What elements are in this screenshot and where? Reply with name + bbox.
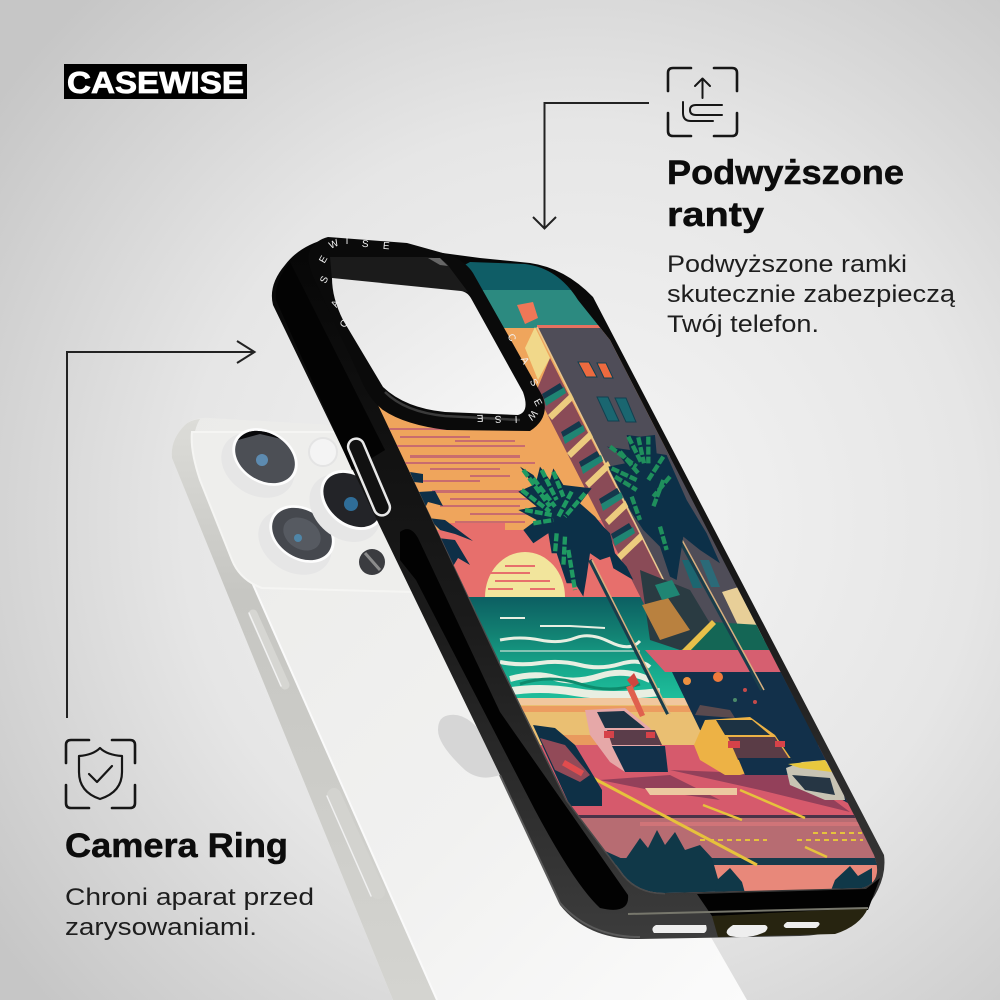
wave green: [520, 679, 640, 689]
building facade: [537, 325, 800, 700]
ring lettering: S: [527, 377, 540, 389]
facade edge line: [536, 326, 664, 580]
rooftop block: [517, 302, 538, 324]
crosswalk: [645, 788, 737, 795]
building windows: [578, 362, 720, 588]
ring lettering: E: [476, 412, 484, 423]
road shadows: [600, 770, 850, 812]
text: camera ring description: Chroni aparat przed: [65, 884, 314, 911]
store lights: [683, 672, 757, 718]
sky streaks: [388, 428, 535, 523]
text: camera ring description: zarysowaniami.: [65, 914, 257, 941]
road pink: [540, 745, 856, 820]
car front right: [786, 760, 845, 800]
palm middle: [518, 467, 633, 597]
sky coral: [437, 520, 662, 610]
ring lettering: S: [318, 274, 331, 285]
storefront: [672, 672, 848, 804]
text: raised edges description: [667, 251, 956, 338]
beach: [517, 698, 688, 705]
shopfront details: [640, 570, 710, 650]
car pink: [585, 708, 668, 772]
waves: [500, 618, 660, 695]
artwork: retro beach street: [370, 255, 900, 895]
case bottom black band: [697, 878, 880, 916]
case outer rim highlight: [500, 775, 640, 937]
ring bottom bevel: [385, 392, 520, 420]
case upper left band: [276, 262, 385, 470]
arrow: to camera ring: [67, 341, 254, 718]
logo: CASEWISE: CASEWISE: [67, 65, 244, 100]
phone case: [272, 238, 884, 939]
palm left: [410, 472, 473, 568]
palm right: [607, 435, 720, 580]
heading: Podwyższone ranty: [667, 154, 904, 234]
camera cut-out: [332, 278, 526, 415]
icon: shield check: [66, 740, 135, 808]
text: raised edges description: skutecznie zabezpieczą: [667, 281, 956, 308]
ring lettering: E: [382, 241, 390, 252]
text: raised edges description: Podwyższone ramki: [667, 251, 907, 278]
side buttons: [249, 613, 378, 896]
ring lettering: S: [494, 413, 502, 424]
charging and speaker ports: [652, 922, 820, 937]
ring lettering: C: [505, 332, 518, 344]
sun: [485, 552, 565, 597]
ring lettering: C: [338, 318, 351, 330]
balcony band: [538, 358, 662, 604]
heading: Camera Ring: Camera Ring: [65, 827, 288, 865]
camera ring: [309, 236, 545, 431]
arrow: to raised edges: [533, 103, 649, 228]
ring highlight: [428, 258, 448, 266]
volume slot pill: [346, 436, 392, 518]
pink cornice: [537, 325, 602, 328]
car yellow: [694, 717, 792, 775]
foreground plants: [592, 830, 872, 893]
sky teal: [466, 262, 572, 291]
white phone: [172, 416, 747, 1000]
store pink band: [645, 650, 790, 672]
ring lettering: I: [515, 413, 518, 424]
road markings: [593, 778, 863, 865]
tall sign: [722, 588, 764, 640]
case bottom lip: [712, 908, 868, 937]
side highlight: [251, 580, 437, 1000]
store roof: [691, 622, 772, 656]
apple logo: [438, 715, 500, 778]
road lower band: [578, 815, 876, 863]
ring lettering: A: [329, 298, 342, 309]
sea: [468, 597, 760, 705]
ring lettering: E: [317, 254, 330, 265]
ring lettering: A: [518, 355, 531, 367]
bottom edge highlight: [628, 908, 868, 914]
heading: Podwyższone ranty: Podwyższone: [667, 154, 904, 192]
ring inner wall: [330, 257, 468, 292]
ring lettering: I: [346, 236, 348, 247]
roof gold accent: [682, 620, 716, 650]
text: raised edges description: Twój telefon.: [667, 311, 819, 338]
lens right: [296, 458, 396, 556]
lens bottom: [246, 493, 345, 588]
sky orange: [370, 328, 670, 538]
balconies: [542, 383, 643, 560]
cream tower: [525, 327, 550, 380]
phone side band: [172, 419, 437, 1000]
ring lettering: S: [361, 239, 369, 250]
text: camera ring description: [65, 884, 314, 941]
ring lettering: E: [531, 397, 544, 409]
ring lettering: W: [327, 238, 341, 252]
flash: [309, 438, 337, 466]
case inner rim highlight: [380, 405, 665, 893]
heading: Podwyższone ranty: ranty: [667, 196, 764, 234]
black side slot: [400, 529, 628, 910]
sidewalk: [616, 865, 878, 893]
car left: [533, 725, 602, 806]
beach signs: [626, 673, 645, 717]
ring lettering: W: [524, 407, 539, 422]
lens top: [232, 428, 298, 486]
ring lettering: [317, 236, 544, 424]
camera bump: [192, 432, 420, 592]
microphone: [359, 549, 385, 575]
palm trunks: [590, 540, 764, 714]
icon: raised edges: [668, 68, 737, 136]
